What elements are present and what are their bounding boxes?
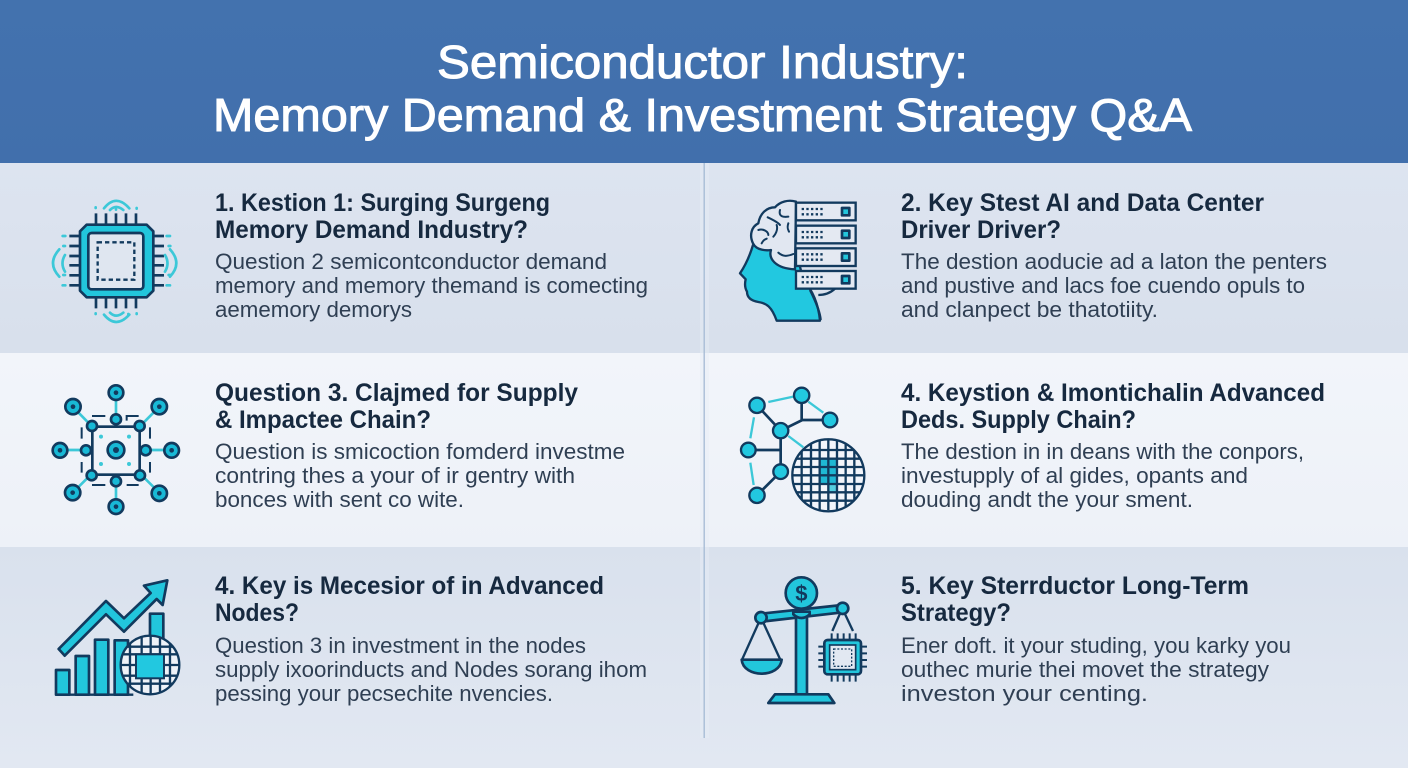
body text: and clanpect be thatotiity. xyxy=(901,297,1158,322)
band: row 1 background xyxy=(0,163,1408,353)
heading: Driver Driver? xyxy=(901,216,1061,244)
body text xyxy=(215,439,625,512)
body text: aememory demorys xyxy=(215,297,412,322)
heading xyxy=(901,189,1264,244)
panel: question 2 xyxy=(740,189,1327,322)
band: row 2 background xyxy=(0,353,1408,547)
body text: Question 3 in investment in the nodes xyxy=(215,633,586,658)
panel: question 6 xyxy=(742,572,1291,706)
icon: balance scale with dollar and chip: $ xyxy=(795,581,807,606)
body text: Question 2 semicontconductor demand xyxy=(215,249,607,274)
body text: douding andt the your sment. xyxy=(901,487,1193,512)
heading xyxy=(215,379,578,434)
heading: 4. Key is Mecesior of in Advanced xyxy=(215,572,604,600)
body text: Ener doft. it your studing, you karky you xyxy=(901,633,1291,658)
body text: supply ixoorinducts and Nodes sorang ihom xyxy=(215,657,647,682)
body text xyxy=(215,249,648,322)
icon: supply chain network and wafer xyxy=(741,388,864,511)
heading: Strategy? xyxy=(901,599,1011,627)
body text: and pustive and lacs foe cuendo opuls to xyxy=(901,273,1305,298)
body text: Question is smicoction fomderd investme xyxy=(215,439,625,464)
title: Semiconductor Industry: xyxy=(437,36,968,88)
body text: contring thes a your of ir gentry with xyxy=(215,463,575,488)
heading xyxy=(215,572,604,627)
heading: Question 3. Clajmed for Supply xyxy=(215,379,578,407)
heading: Nodes? xyxy=(215,599,299,627)
heading: 1. Kestion 1: Surging Surgeng xyxy=(215,189,550,217)
heading: 2. Key Stest AI and Data Center xyxy=(901,189,1264,217)
heading xyxy=(901,572,1249,627)
icon: balance scale with dollar and chip xyxy=(742,577,867,703)
icon: AI head with brain and servers xyxy=(740,201,856,321)
icon: memory chip with signal waves xyxy=(53,201,176,322)
panel: question 3 xyxy=(53,379,625,514)
icon: chip network hub xyxy=(53,385,179,514)
band: row 3 background xyxy=(0,547,1408,768)
title xyxy=(213,36,1192,141)
icon: growth chart with wafer xyxy=(55,580,180,698)
body text: The destion aoducie ad a laton the penters xyxy=(901,249,1327,274)
header banner xyxy=(0,0,1408,163)
body text: The destion in in deans with the conpors, xyxy=(901,439,1304,464)
title: Memory Demand & Investment Strategy Q&A xyxy=(213,89,1192,141)
body text xyxy=(215,633,647,706)
heading: & Impactee Chain? xyxy=(215,406,431,434)
heading xyxy=(215,189,550,244)
body text: bonces with sent co wite. xyxy=(215,487,464,512)
body text: memory and memory themand is comecting xyxy=(215,273,648,298)
body text xyxy=(901,633,1291,706)
panel: question 5 xyxy=(55,572,647,706)
heading: 4. Keystion & Imontichalin Advanced xyxy=(901,379,1325,407)
panel: question 4 xyxy=(741,379,1325,512)
body text: pessing your pecsechite nvencies. xyxy=(215,681,553,706)
body text: outhec murie thei movet the strategy xyxy=(901,657,1270,682)
heading: 5. Key Sterrductor Long-Term xyxy=(901,572,1249,600)
body text xyxy=(901,439,1304,512)
heading: Deds. Supply Chain? xyxy=(901,406,1136,434)
body text: investon your centing. xyxy=(901,681,1148,706)
heading: Memory Demand Industry? xyxy=(215,216,528,244)
heading xyxy=(901,379,1325,434)
body text xyxy=(901,249,1327,322)
panel: question 1 xyxy=(53,189,648,322)
body text: investupply of al gides, opants and xyxy=(901,463,1248,488)
